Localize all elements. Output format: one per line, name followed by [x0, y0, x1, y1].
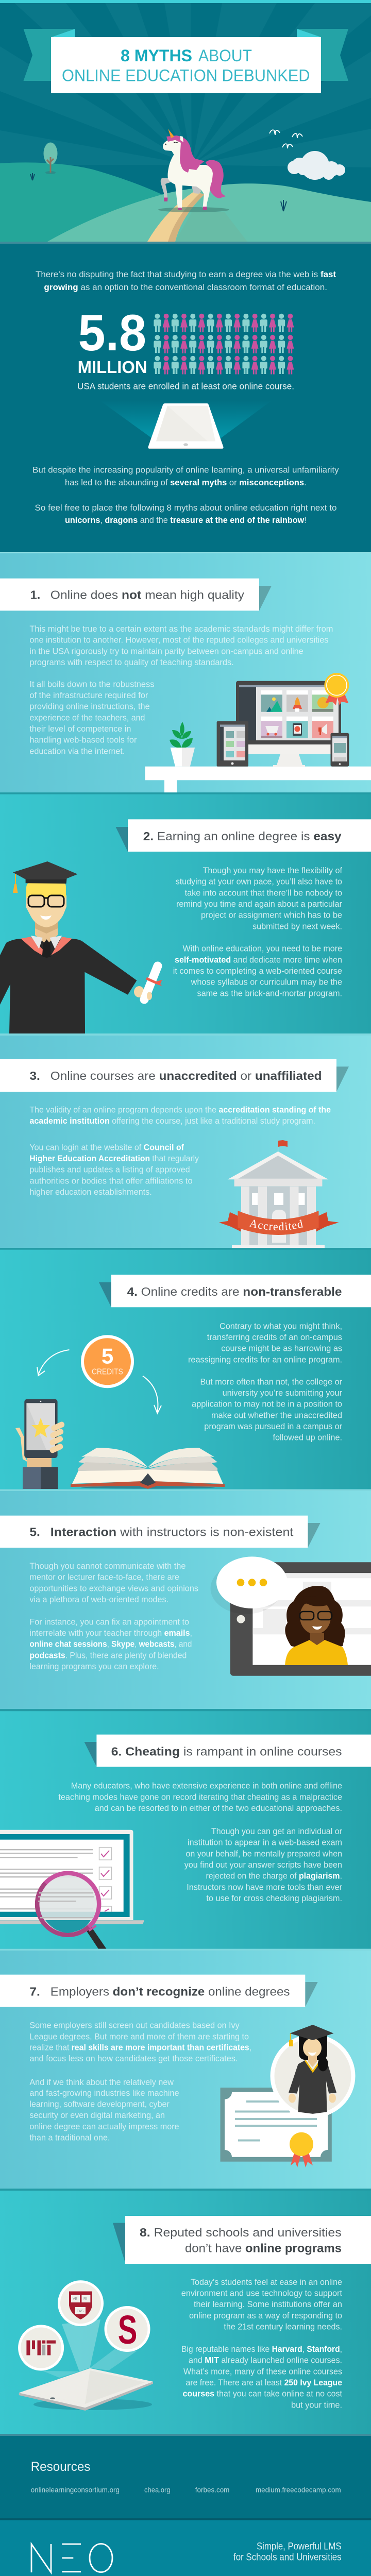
heading ribbon 7 — [0, 1975, 318, 2007]
list: source links: forbes.com — [195, 2485, 229, 2494]
statistic caption: USA students are enrolled in at least one online course. — [77, 381, 294, 392]
text: myth 7 paragraph 2 — [29, 2077, 179, 2142]
panel: myth 6 — [0, 1709, 371, 1949]
flag — [278, 1140, 288, 1152]
heading ribbon 5 — [0, 1516, 321, 1548]
pictogram: rows of students — [154, 314, 294, 374]
text: tagline: Simple, Powerful LMS — [257, 2541, 342, 2552]
text: myth 5 paragraph 2: For instance, you can fix an appointment to — [29, 1617, 189, 1626]
text: myth 1 paragraph 1 — [29, 624, 333, 667]
teacher — [285, 1586, 348, 1665]
text: myth 8 paragraph 1: Today’s students feel at ease in an online — [191, 2277, 342, 2287]
text: myth 5 paragraph 2: learning programs you can explore. — [29, 1662, 159, 1671]
heading ribbon 1: Online does not mean high quality — [50, 588, 245, 602]
badge: 5 credits: CREDITS — [92, 1367, 123, 1376]
text: myth 1 paragraph 2: It all boils down to the robustness — [29, 679, 154, 689]
text: myth 1 paragraph 1: one institution to another. However, most of the reputed colleges and universities — [29, 635, 328, 645]
illustration: video call on tablet — [210, 1556, 371, 1676]
text: tagline: for Schools and Universities — [233, 2551, 342, 2563]
text: myth 1 paragraph 1: in the USA rigorously try to maintain parity between on-campus and online — [29, 646, 303, 656]
heading ribbon 7: Employers don’t recognize online degrees — [50, 1985, 290, 1998]
text: myth 4 paragraph 1: Contrary to what you might think, — [220, 1321, 342, 1331]
mortarboard — [13, 861, 78, 893]
accredited ribbon: Accredited — [249, 1219, 303, 1230]
text: myth 8 paragraph 2: are free. There are at least 250 Ivy League — [185, 2378, 342, 2387]
text: myth 8 paragraph 2 — [181, 2344, 342, 2410]
text: myth 7 paragraph 2: online degree can actually impress more — [29, 2122, 179, 2131]
text: myth 1 paragraph 2: their level of competence in — [29, 724, 131, 734]
panel: myth 4 — [0, 1248, 371, 1489]
text: myth 5 paragraph 1: opportunities to exchange views and opinions — [29, 1583, 198, 1593]
heading ribbon 8: don’t have online programs — [185, 2241, 342, 2255]
heading ribbon 3: 3. — [29, 1069, 40, 1082]
intro paragraph — [36, 269, 336, 292]
text: myth 2 paragraph 1: remind you time and again about a particular — [176, 899, 342, 909]
title banner: ONLINE EDUCATION DEBUNKED — [62, 66, 310, 85]
illustration: accredited building — [219, 1140, 339, 1248]
list: source links: chea.org — [144, 2485, 171, 2494]
title banner: 8 MYTHS — [121, 46, 192, 65]
harvard badge — [59, 2282, 102, 2325]
unicorn — [161, 129, 226, 210]
text: myth 4 paragraph 2: But more often than not, the college or — [200, 1377, 342, 1386]
text: myth 4 paragraph 2: program was pursued in a campus or — [204, 1421, 342, 1431]
tablet — [19, 2368, 153, 2411]
text: myth 4 paragraph 2: make out whether the unaccredited — [211, 1410, 342, 1420]
panel: footer — [0, 2518, 371, 2576]
text: myth 6 paragraph 2: institution to appear in a web-based exam — [188, 1838, 342, 1848]
intro paragraph: growing as an option to the conventional classroom format of education. — [44, 282, 327, 292]
text: myth 6 paragraph 1: Many educators, who have extensive experience in both online and offline — [71, 1781, 342, 1791]
heading ribbon 7: 7. — [29, 1985, 40, 1998]
heading ribbon 2: 2. Earning an online degree is easy — [143, 829, 342, 843]
statistic: 5.8 million: MILLION — [78, 358, 147, 377]
text: myth 5 paragraph 1: Though you cannot communicate with the — [29, 1561, 186, 1571]
accredited ribbon — [219, 1211, 339, 1235]
text: myth 6 paragraph 2: rejected on the charge of plagiarism. — [206, 1871, 342, 1881]
text: myth 8 paragraph 2: and MIT already launched online courses. — [189, 2355, 342, 2365]
text: myth 1 paragraph 2: handling web-based tools for — [29, 735, 137, 745]
text: myth 8 paragraph 1: the 21st century learning needs. — [224, 2322, 342, 2332]
checkboxes — [99, 1848, 111, 1911]
gown — [0, 939, 137, 1033]
heading ribbon 5: Interaction with instructors is non-existent — [50, 1526, 294, 1539]
arrow: right, to book — [143, 1376, 161, 1413]
text: myth 6 paragraph 1: and can be resorted to in either of the two educational approaches. — [95, 1803, 342, 1813]
text: myths intro: unicorns, dragons and the treasure at the end of the rainbow! — [65, 515, 307, 525]
panel: resources — [0, 2434, 371, 2518]
text: myth 7 paragraph 2: security or even digital marketing, an — [29, 2110, 165, 2120]
text: myth 6 paragraph 2: Instructors now have more tools than ever — [187, 1882, 342, 1892]
text: myth 2 paragraph 1: take into account that there’ll be nobody to — [185, 888, 342, 897]
panel: hero and introduction — [0, 0, 371, 552]
text: myths intro: But despite the increasing popularity of online learning, a universal unfamiliarity — [32, 465, 339, 474]
plant — [170, 722, 195, 767]
text: myth 7 paragraph 1: and focus less on how candidates get those certificates. — [29, 2054, 238, 2063]
heading ribbon 6 — [85, 1735, 371, 1767]
heading ribbon 4 — [99, 1275, 371, 1307]
title banner — [24, 29, 348, 93]
text: myth 3 paragraph 2: You can login at the website of Council of — [29, 1142, 184, 1152]
heading ribbon 3: Online courses are unaccredited or unaffiliated — [50, 1069, 322, 1082]
illustration: graduate with diploma — [0, 861, 162, 1033]
star rating — [31, 1418, 50, 1437]
illustration: certificate — [221, 2088, 332, 2167]
text: myth 3 paragraph 2: authorities or bodies that offer affiliations to — [29, 1176, 193, 1185]
illustration: unicorn landscape — [0, 129, 371, 242]
text: myth 4 paragraph 1: transferring credits of an on-campus — [207, 1332, 342, 1342]
text: myth 2 paragraph 1 — [176, 866, 342, 931]
speech bubble — [210, 1556, 288, 1614]
text: myth 2 paragraph 1: Though you may have the flexibility of — [203, 866, 342, 875]
heading ribbon 8: 8. Reputed schools and universities — [140, 2226, 342, 2239]
diploma — [134, 966, 162, 1000]
list: source links — [31, 2485, 341, 2494]
text: myth 6 paragraph 2: Though you can get an individual or — [211, 1826, 342, 1836]
text: myth 7 paragraph 1: League degrees. But more and more of them are starting to — [29, 2031, 249, 2041]
statistic: 5.8 million: 5.8 — [78, 304, 146, 361]
text: myth 4 paragraph 2: followed up online. — [273, 1433, 342, 1443]
text: myth 1 paragraph 2: education via the internet. — [29, 746, 125, 756]
list: source links: onlinelearningconsortium.org — [31, 2485, 120, 2494]
text: myth 8 paragraph 2: but your time. — [291, 2400, 342, 2410]
roof — [228, 1151, 328, 1187]
text: myth 5 paragraph 2: interrelate with your teacher through emails, — [29, 1628, 192, 1638]
text: myth 5 paragraph 1: via a plethora of web-oriented modes. — [29, 1595, 168, 1604]
text: myth 5 paragraph 1: mentor or lecturer face-to-face, there are — [29, 1572, 179, 1582]
heading ribbon 2 — [115, 819, 371, 852]
neck and collar — [21, 922, 72, 958]
head — [26, 882, 66, 927]
text: myth 8 paragraph 1: environment and use technology to support — [181, 2288, 342, 2298]
heading ribbon 8 — [113, 2216, 371, 2264]
phone — [331, 733, 349, 767]
text: myth 8 paragraph 2: What’s more, many of these online courses — [183, 2366, 342, 2376]
magnifying glass — [37, 1873, 107, 1949]
text: myth 1 paragraph 2: providing online instructions, the — [29, 702, 150, 711]
text: tagline — [233, 2541, 342, 2563]
badge: 5 credits: 5 — [102, 1344, 113, 1368]
illustration: female graduate portrait — [272, 2025, 353, 2115]
text: myth 4 paragraph 1: reassigning credits for an online program. — [188, 1354, 342, 1364]
heading: resources: Resources — [31, 2460, 90, 2474]
text: myth 3 paragraph 2 — [29, 1142, 199, 1197]
text: myths intro: So feel free to place the following 8 myths about online education right next to — [35, 503, 337, 513]
badge: 5 credits — [81, 1335, 134, 1388]
text: myth 4 paragraph 1: course might be as harrowing as — [221, 1344, 342, 1353]
text: myth 7 paragraph 2: learning, software development, cyber — [29, 2099, 170, 2109]
tablet — [217, 721, 248, 767]
text: myth 2 paragraph 1: studying at your own pace, you’ll also have to — [176, 877, 342, 887]
text: myth 1 paragraph 2 — [29, 679, 154, 756]
text: myth 8 paragraph 2: Big reputable names like Harvard, Stanford, — [181, 2344, 342, 2354]
text: myth 3 paragraph 1: academic institution offering the course, just like a traditional study program. — [29, 1116, 315, 1126]
text: myth 2 paragraph 2: same as the brick-and-mortar program. — [197, 988, 342, 998]
text: myth 6 paragraph 2: you find out your answer scripts have been — [184, 1860, 342, 1870]
text: myth 2 paragraph 2: it comes to completing a web-oriented course — [173, 966, 342, 976]
text: myth 1 paragraph 2: of the infrastructure required for — [29, 690, 148, 700]
cloud — [288, 151, 345, 180]
text: myth 5 paragraph 2 — [29, 1617, 192, 1671]
text: myth 3 paragraph 2: publishes and updates a listing of approved — [29, 1165, 190, 1175]
birds — [269, 130, 302, 148]
panel: myth 1 — [0, 552, 371, 792]
heading ribbon 4: 4. Online credits are non-transferable — [127, 1285, 342, 1298]
text: myth 1 paragraph 2: experience of the teachers, and — [29, 713, 145, 722]
text: myth 7 paragraph 2: And if we think about the relatively new — [29, 2077, 174, 2087]
stanford badge: S — [118, 2307, 137, 2352]
icon: glowing tablet — [99, 400, 272, 449]
text: myth 2 paragraph 2 — [173, 944, 342, 998]
text: myth 3 paragraph 1 — [29, 1105, 331, 1126]
text: myth 6 paragraph 1 — [58, 1781, 342, 1813]
text: myth 7 paragraph 2: and fast-growing industries like machine — [29, 2088, 179, 2098]
text: myths intro: has led to the abounding of several myths or misconceptions. — [65, 478, 307, 487]
harvard badge: RI — [83, 2297, 87, 2301]
illustration: laptop with checklist — [0, 1830, 144, 1949]
text: myth 4 paragraph 2 — [192, 1377, 342, 1443]
text: myth 8 paragraph 2: courses that you can take online at no cost — [182, 2389, 342, 2399]
text: myth 2 paragraph 1: submitted by next week. — [252, 921, 342, 931]
text: myth 4 paragraph 2: application to may not be in a position to — [192, 1399, 342, 1409]
stanford badge — [106, 2307, 149, 2352]
text: myth 3 paragraph 2: higher education establishments. — [29, 1187, 152, 1197]
seal — [290, 2132, 313, 2167]
text: myth 2 paragraph 1: project or assignment which has to be — [201, 910, 342, 920]
text: myth 2 paragraph 2: With online education, you need to be more — [182, 944, 342, 954]
panel: myth 8 — [0, 2189, 371, 2434]
arrow: left, to phone — [37, 1350, 69, 1376]
text: myth 6 paragraph 2: on your behalf, be mentally prepared when — [185, 1849, 342, 1858]
text: myth 7 paragraph 2: than a traditional one. — [29, 2132, 110, 2142]
tree — [43, 142, 58, 174]
title banner: ABOUT — [198, 46, 252, 65]
intro paragraph: There’s no disputing the fact that studying to earn a degree via the web is fast — [36, 269, 336, 279]
desk — [145, 767, 371, 792]
text: myth 4 paragraph 1 — [188, 1321, 342, 1364]
desktop monitor — [236, 681, 342, 767]
panel: myth 3 — [0, 1033, 371, 1248]
panel: myth 2 — [0, 792, 371, 1033]
heading ribbon 1: 1. — [30, 588, 40, 602]
list: source links: medium.freecodecamp.com — [256, 2485, 341, 2494]
illustration: hand holding phone — [15, 1399, 65, 1489]
grass tufts — [30, 173, 286, 211]
heading ribbon 1 — [0, 579, 272, 611]
text: myth 8 paragraph 1: their learning. Some institutions offer an — [194, 2299, 342, 2309]
text: myth 3 paragraph 2: Higher Education Accreditation that regularly — [29, 1154, 199, 1163]
logo: NEO — [31, 2544, 112, 2572]
panel: myth 7 — [0, 1949, 371, 2189]
text: myth 5 paragraph 1 — [29, 1561, 198, 1604]
text: myth 7 paragraph 1: realize that real skills are more important than certificates, — [29, 2043, 251, 2053]
text: myth 6 paragraph 1: teaching modes have gone on record iterating that cheating as a malpractice — [58, 1792, 342, 1802]
text: myth 2 paragraph 2: self-motivated and dedicate more time when — [175, 955, 342, 964]
text: myth 8 paragraph 1: online program as a way of responding to — [189, 2311, 342, 2320]
text: myths intro — [32, 465, 339, 525]
text: myth 1 paragraph 1: This might be true to a certain extent as the academic standards might differ from — [29, 624, 333, 634]
harvard badge: TAS — [77, 2310, 83, 2313]
text: myth 4 paragraph 2: university you’re submitting your — [223, 1388, 342, 1398]
text: myth 6 paragraph 2 — [184, 1826, 342, 1903]
text: myth 7 paragraph 1 — [29, 2021, 251, 2063]
text: myth 5 paragraph 2: podcasts. Plus, there are plenty of blended — [29, 1650, 187, 1660]
illustration: open book — [71, 1448, 225, 1489]
heading ribbon 5: 5. — [29, 1526, 40, 1539]
illustration: desk with devices — [145, 673, 371, 792]
text: myth 2 paragraph 2: whose syllabus or curriculum may be the — [191, 977, 342, 987]
text: myth 7 paragraph 1: Some employers still screen out candidates based on Ivy — [29, 2021, 240, 2030]
walls and columns — [232, 1187, 325, 1248]
mit badge — [20, 2326, 63, 2369]
text: myth 5 paragraph 2: online chat sessions, Skype, webcasts, and — [29, 1639, 192, 1649]
icon: award medal — [324, 673, 349, 705]
illustration: tablet projecting university logos — [19, 2282, 153, 2411]
text: myth 1 paragraph 1: programs with respect to quality of teaching standards. — [29, 657, 234, 667]
text: myth 8 paragraph 1 — [181, 2277, 342, 2332]
heading ribbon 6: 6. Cheating is rampant in online courses — [111, 1744, 342, 1758]
heading ribbon 3 — [0, 1059, 349, 1092]
harvard badge: VE — [73, 2297, 78, 2301]
text: myth 6 paragraph 2: to use for cross checking plagiarism. — [206, 1893, 342, 1903]
panel: myth 5 — [0, 1489, 371, 1709]
text: myth 3 paragraph 1: The validity of an online program depends upon the accreditation standing of the — [29, 1105, 331, 1114]
